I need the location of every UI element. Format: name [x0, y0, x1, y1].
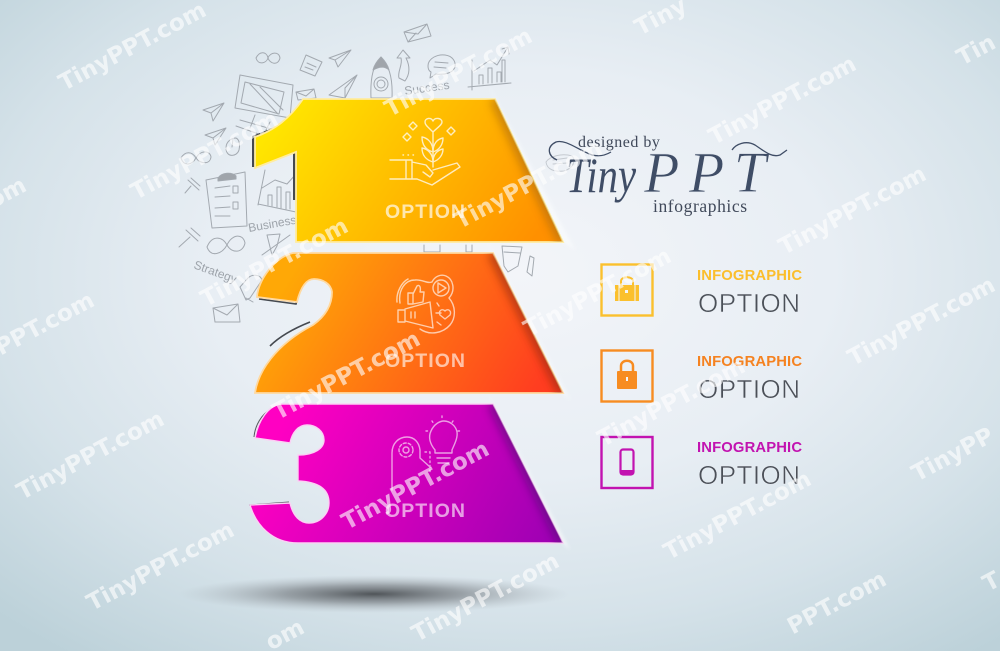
- watermarks: Tin: [953, 30, 1000, 71]
- logo: designed by TinyPPT infographics: PPT: [643, 140, 770, 205]
- watermarks: TinyPPT.com: [594, 353, 750, 453]
- icon: padlock in orange square: [602, 350, 652, 402]
- option row 3: [602, 437, 802, 490]
- doodle sketches behind the numbers: [179, 24, 574, 322]
- doodle sketches behind the numbers: Strategy: [192, 258, 239, 286]
- watermarks: TinyPPT.com: [844, 272, 1000, 372]
- doodle sketches behind the numbers: Success: [403, 78, 450, 98]
- watermarks: TinyPPT.com: [13, 406, 169, 506]
- label: option 3: OPTION: [385, 500, 465, 522]
- watermarks: TinyPPT.com: [451, 135, 607, 235]
- option row 1: [602, 264, 802, 318]
- heading: infographic yellow: INFOGRAPHIC: [697, 268, 802, 284]
- watermarks: TinyPPT.com: [338, 436, 494, 536]
- logo: designed by TinyPPT infographics: [549, 134, 787, 216]
- watermarks: TinyPPT.com: [269, 326, 425, 426]
- icon: megaphone and social bubble: [397, 275, 454, 333]
- label: option 2: OPTION: [385, 350, 465, 372]
- text: option: OPTION: [698, 374, 800, 404]
- panel: number 2: [255, 253, 563, 393]
- panel: number 3: [249, 404, 563, 543]
- watermarks: TinyPPT.com: [408, 548, 564, 648]
- fold highlights beside the slanted edges: [487, 86, 575, 550]
- icon: smartphone in purple square: [602, 437, 652, 488]
- icon: hand holding plant: [390, 118, 460, 185]
- watermarks: TinyPPT.com: [520, 243, 676, 343]
- heading: infographic orange: INFOGRAPHIC: [697, 354, 802, 370]
- watermarks: TinyPPT.com: [705, 51, 861, 151]
- doodle sketches behind the numbers: Business: [247, 213, 297, 235]
- icon: briefcase in yellow square: [602, 264, 652, 316]
- floor shadow: [178, 575, 570, 613]
- heading: infographic purple: INFOGRAPHIC: [697, 440, 802, 456]
- watermarks: TinyPPT.com: [775, 161, 931, 261]
- text: option: OPTION: [698, 460, 800, 490]
- logo: designed by TinyPPT infographics: designed by: [578, 134, 660, 151]
- option row 2: [602, 350, 802, 404]
- label: option 1: OPTION: [385, 201, 465, 223]
- watermarks: TinyPP: [908, 423, 998, 487]
- logo: designed by TinyPPT infographics: infographics: [653, 196, 748, 216]
- panel: number 1: [252, 99, 563, 242]
- watermarks: PPT.com: [783, 566, 891, 640]
- watermarks: TinyPPT.com: [381, 23, 537, 123]
- text: option: OPTION: [698, 288, 800, 318]
- watermarks: TinyPPT.com: [660, 466, 816, 566]
- watermarks: TinyPPT.com: [83, 517, 239, 617]
- watermarks: TinyPPT.com: [127, 106, 283, 206]
- logo: designed by TinyPPT infographics: Tiny: [566, 147, 637, 203]
- watermarks: TinyPPT.com: [55, 0, 211, 97]
- icon: head with gear and light bulb: [392, 416, 461, 490]
- watermarks: TinyPPT.com: [197, 213, 353, 313]
